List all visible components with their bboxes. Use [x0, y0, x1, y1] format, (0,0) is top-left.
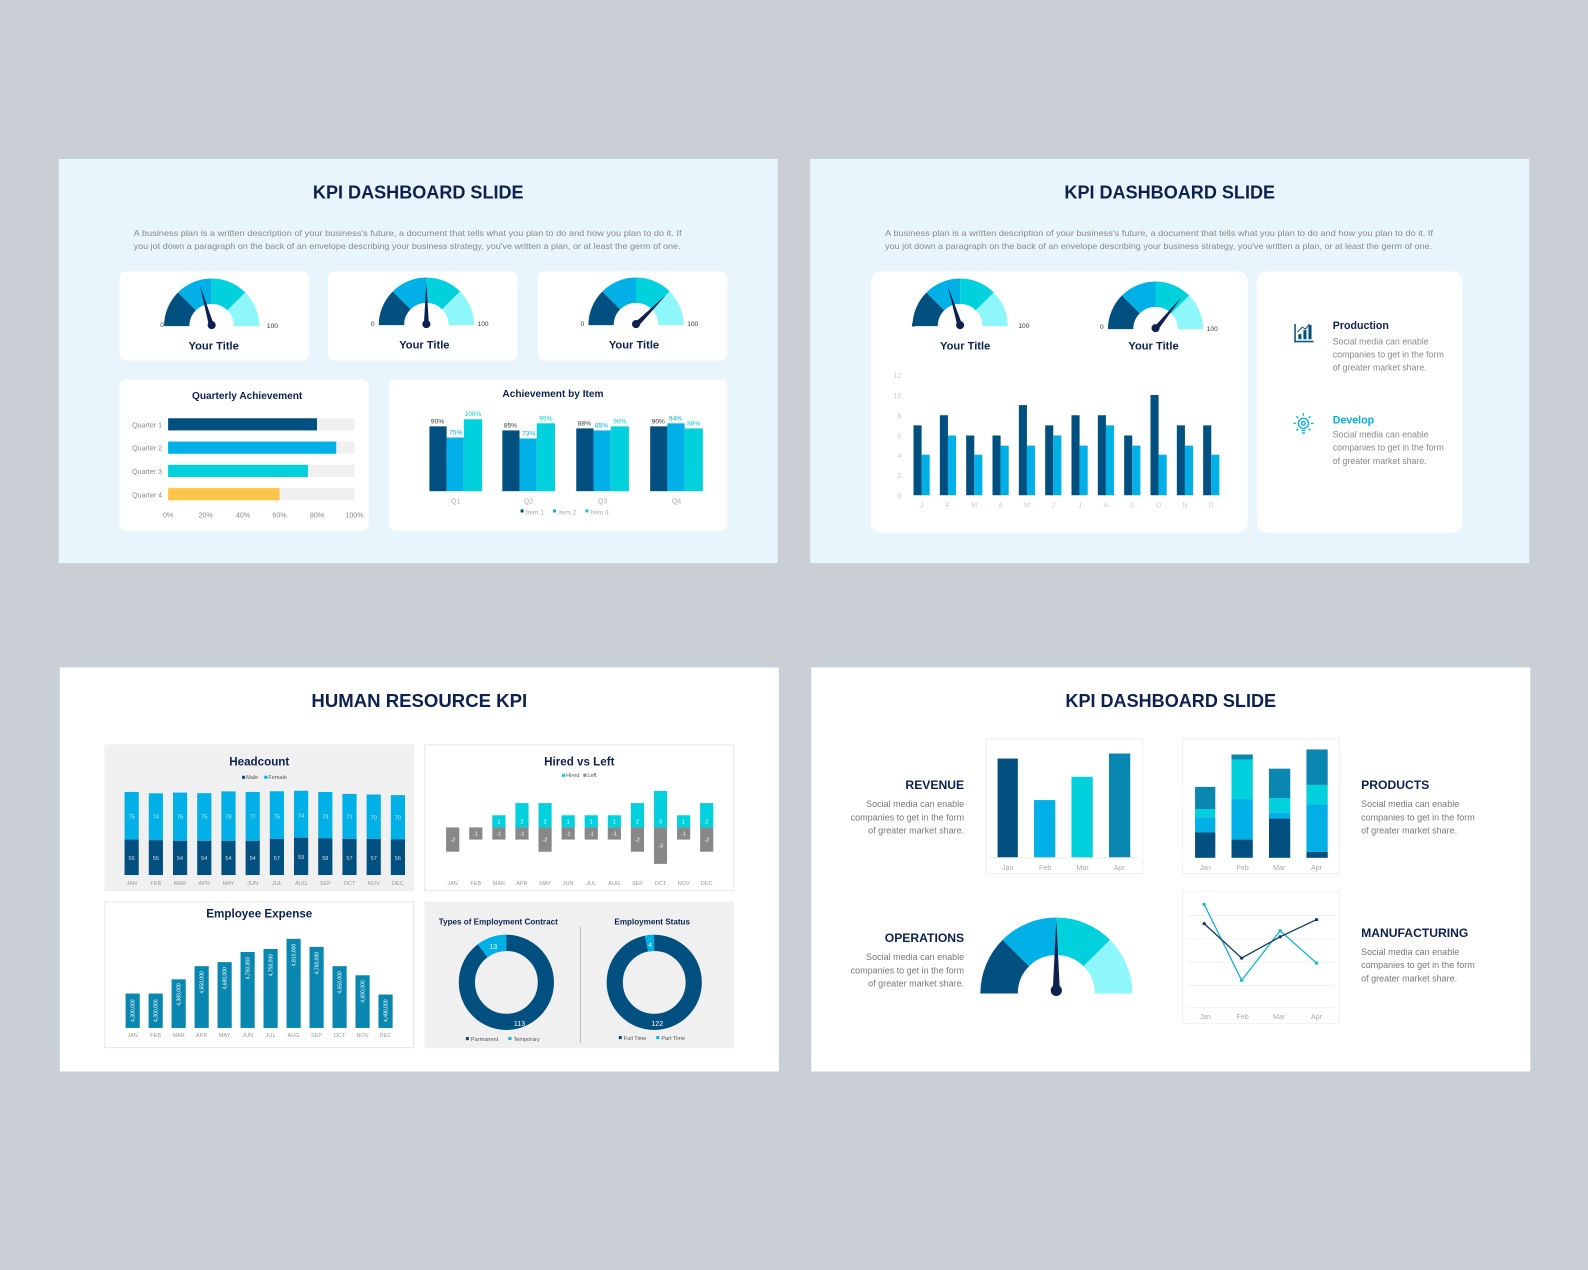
gauge card 1	[120, 271, 309, 361]
monthly bar chart: 6	[897, 433, 901, 441]
gauge card 2: Your Title	[399, 339, 449, 351]
hired vs left chart: AUG	[608, 881, 620, 887]
revenue text: of greater market share.	[868, 826, 964, 836]
achievement by item chart: Item 2	[558, 509, 577, 516]
hired vs left chart: -2	[635, 838, 640, 844]
employee expense chart: 4,650,000	[338, 971, 344, 994]
title: KPI DASHBOARD SLIDE	[1065, 691, 1276, 711]
hired vs left chart: Hired	[566, 773, 579, 779]
employee expense chart: 4,300,000	[154, 999, 160, 1022]
headcount chart: 75	[274, 814, 280, 820]
text: develop: Social media can enable	[1333, 430, 1429, 440]
hired vs left chart: Hired vs Left	[544, 756, 615, 769]
icon: lightbulb	[1293, 413, 1314, 433]
employee expense chart: FEB	[150, 1033, 161, 1039]
hired vs left chart: MAR	[493, 881, 505, 887]
quarterly achievement chart: Quarterly Achievement	[192, 391, 303, 402]
quarterly achievement chart: Quarter 1	[132, 421, 162, 429]
products stacked bar chart: Mar	[1273, 864, 1286, 872]
donut: employment contract	[439, 918, 562, 1043]
text: production: Production	[1333, 320, 1389, 332]
employee expense chart: 4,380,000	[177, 983, 183, 1006]
monthly bar chart: D	[1209, 501, 1214, 509]
text: production: Social media can enable	[1333, 336, 1429, 346]
gauge card 2: 100	[478, 321, 489, 328]
headcount chart: 75	[129, 814, 135, 820]
headcount chart: JUL	[272, 881, 282, 887]
hired vs left chart: -2	[704, 838, 709, 844]
gauge card 3: 0	[580, 321, 584, 328]
hired vs left chart: -1	[589, 832, 594, 838]
headcount chart: 54	[225, 856, 232, 862]
headcount chart: DEC	[392, 881, 404, 887]
manufacturing line chart	[1182, 892, 1339, 1023]
achievement by item chart: 90%	[613, 418, 627, 425]
hired vs left chart: FEB	[470, 881, 481, 887]
gauge 2	[1100, 282, 1218, 352]
achievement by item chart: Q3	[598, 497, 607, 505]
manufacturing line chart: Feb	[1237, 1013, 1249, 1021]
monthly bar chart: M	[971, 501, 977, 509]
slide 3: human resource KPI	[60, 667, 779, 1071]
hired vs left chart: 2	[636, 819, 639, 825]
revenue text	[851, 778, 964, 836]
text: production	[1333, 320, 1444, 373]
headcount chart: 59	[298, 855, 304, 861]
operations text: Social media can enable	[866, 952, 964, 962]
text: develop: Develop	[1333, 414, 1375, 426]
intro paragraph: you jot down a paragraph on the back of an envelope describing your business strategy, you've written a plan, or at least the germ of one.	[885, 241, 1432, 251]
gauge 2: 100	[1207, 326, 1218, 333]
monthly bar chart: 8	[897, 412, 901, 420]
monthly bar chart: O	[1156, 501, 1162, 509]
operations text: companies to get in the form	[851, 965, 964, 975]
revenue text: companies to get in the form	[851, 812, 964, 822]
achievement by item chart: 100%	[465, 411, 482, 418]
intro paragraph	[134, 228, 682, 251]
hired vs left chart: 2	[520, 819, 524, 825]
monthly bar chart: J	[1051, 501, 1055, 509]
employee expense chart: OCT	[334, 1033, 346, 1039]
revenue bar chart: Jan	[1002, 864, 1013, 872]
hired vs left chart: JUN	[563, 881, 574, 887]
headcount chart: 76	[177, 814, 183, 820]
quarterly achievement chart	[120, 380, 369, 531]
headcount chart: NOV	[368, 881, 380, 887]
achievement by item chart: 90%	[652, 418, 665, 425]
products stacked bar chart: Feb	[1237, 864, 1249, 872]
text: production: companies to get in the form	[1333, 350, 1444, 360]
employee expense chart: SEP	[311, 1033, 322, 1039]
gauge card 2: 0	[371, 321, 375, 328]
donut: employment status: Part Time	[661, 1036, 685, 1042]
quarterly achievement chart: 0%	[163, 512, 174, 520]
gauge 2: Your Title	[1128, 340, 1179, 352]
manufacturing text: of greater market share.	[1361, 973, 1457, 983]
gauge 2: 0	[1100, 324, 1104, 331]
revenue text: Social media can enable	[866, 799, 964, 809]
operations text: OPERATIONS	[885, 931, 964, 945]
headcount chart: 74	[153, 814, 159, 820]
revenue bar chart	[986, 739, 1143, 874]
employee expense chart: DEC	[380, 1033, 391, 1039]
hired vs left chart: -3	[658, 844, 663, 850]
donut: employment contract: Types of Employment Contract	[439, 918, 558, 927]
headcount chart: OCT	[344, 881, 356, 887]
title: HUMAN RESOURCE KPI	[311, 691, 527, 711]
monthly bar chart: 4	[897, 452, 901, 460]
hired vs left chart: JAN	[447, 881, 458, 887]
headcount chart: 74	[298, 813, 304, 819]
achievement by item chart: 90%	[431, 418, 444, 425]
monthly bar chart: 2	[897, 472, 901, 480]
quarterly achievement chart: 80%	[310, 512, 325, 520]
achievement by item chart: Achievement by Item	[502, 389, 604, 400]
monthly bar chart: J	[920, 501, 924, 509]
monthly bar chart: 0	[897, 492, 901, 500]
monthly bar chart: J	[1078, 501, 1082, 509]
icon: chart	[1294, 324, 1314, 342]
donut: employment status	[608, 918, 701, 1042]
employee expense chart: 4,750,000	[246, 957, 252, 979]
achievement by item chart: Q4	[672, 497, 681, 505]
employee expense chart: MAY	[219, 1033, 231, 1039]
monthly bar chart: F	[946, 501, 951, 509]
hired vs left chart: NOV	[678, 881, 690, 887]
hired vs left chart: -1	[566, 832, 571, 838]
headcount chart: 57	[346, 856, 353, 862]
employee expense chart: 4,600,000	[361, 980, 367, 1003]
quarterly achievement chart: Quarter 3	[132, 468, 162, 476]
headcount chart: 70	[371, 815, 377, 821]
achievement by item chart	[389, 380, 727, 531]
quarterly achievement chart: 40%	[236, 512, 251, 520]
gauge card 1: 100	[267, 323, 278, 330]
text: develop: companies to get in the form	[1333, 443, 1444, 453]
manufacturing text: companies to get in the form	[1361, 960, 1475, 970]
gauge card 1: 0	[160, 322, 164, 329]
employee expense chart: Employee Expense	[206, 908, 313, 921]
quarterly achievement chart: Quarter 4	[132, 491, 162, 499]
quarterly achievement chart: 20%	[199, 512, 213, 520]
headcount chart: 56	[395, 856, 401, 862]
employee expense chart: AUG	[288, 1033, 300, 1039]
monthly bar chart: M	[1024, 501, 1030, 509]
slide 2: KPI dashboard	[810, 159, 1529, 563]
intro paragraph: A business plan is a written description of your business's future, a document that tells what you plan to do and how you plan to do it. If	[885, 228, 1434, 238]
employee expense chart: 4,300,000	[131, 999, 137, 1022]
headcount chart: SEP	[320, 881, 331, 887]
hired vs left chart: JUL	[586, 881, 596, 887]
donut: employment status: Full Time	[624, 1036, 646, 1042]
hired vs left chart: 2	[544, 819, 547, 825]
hired vs left chart: SEP	[632, 881, 643, 887]
donut: employment status: 4	[649, 943, 653, 949]
headcount chart: 56	[129, 856, 135, 862]
slide 4: KPI dashboard	[811, 667, 1530, 1071]
employee expense chart: JAN	[127, 1033, 138, 1039]
gauge 1: Your Title	[940, 340, 990, 352]
hired vs left chart: APR	[516, 881, 528, 887]
headcount chart: 78	[225, 814, 232, 820]
headcount chart: 54	[177, 856, 183, 862]
products stacked bar chart	[1182, 739, 1339, 874]
headcount chart: APR	[199, 881, 210, 887]
intro paragraph	[885, 228, 1434, 251]
revenue bar chart: Apr	[1114, 864, 1125, 872]
manufacturing text: MANUFACTURING	[1361, 926, 1468, 940]
achievement by item chart: Item 3	[590, 509, 609, 516]
employee expense chart: 4,680,000	[223, 967, 229, 990]
headcount chart: 55	[153, 856, 159, 862]
achievement by item chart: Item 1	[526, 509, 544, 516]
gauge card 1: Your Title	[189, 340, 239, 352]
products stacked bar chart: Jan	[1199, 864, 1211, 872]
employee expense chart	[105, 902, 414, 1048]
monthly bar chart: A	[1104, 501, 1109, 509]
hired vs left chart: 3	[659, 819, 662, 825]
donut: employment contract: 13	[489, 943, 497, 951]
gauge card 3	[538, 271, 727, 361]
headcount chart: 77	[250, 814, 256, 820]
gauge card 2	[328, 271, 518, 361]
headcount chart: MAR	[174, 881, 186, 887]
manufacturing line chart: Jan	[1199, 1013, 1211, 1021]
gauge 1	[912, 279, 1030, 352]
hired vs left chart: -1	[612, 832, 617, 838]
operations text: of greater market share.	[868, 978, 964, 988]
donut: employment contract: Parmanent	[471, 1037, 499, 1043]
quarterly achievement chart: 60%	[272, 512, 287, 520]
employee expense chart: MAR	[172, 1033, 185, 1039]
headcount chart: 57	[371, 856, 377, 862]
achievement by item chart: 94%	[669, 415, 682, 422]
monthly bar chart: S	[1130, 501, 1135, 509]
employee expense chart: 4,760,000	[315, 952, 321, 974]
hired vs left chart: 1	[682, 819, 685, 825]
headcount chart: 54	[201, 856, 207, 862]
panel: production and develop	[1257, 271, 1462, 533]
hired vs left chart: -1	[473, 832, 478, 838]
achievement by item chart: 85%	[595, 422, 608, 429]
donut charts panel	[424, 901, 734, 1048]
hired vs left chart: 1	[567, 819, 570, 825]
headcount chart: 73	[322, 814, 328, 820]
intro paragraph: A business plan is a written description of your business's future, a document that tells what you plan to do and how you plan to do it. If	[134, 228, 682, 238]
employee expense chart: NOV	[357, 1033, 369, 1039]
headcount chart: FEB	[150, 881, 162, 887]
title: KPI DASHBOARD SLIDE	[313, 183, 524, 203]
operations text	[851, 931, 964, 988]
headcount chart: 70	[395, 815, 401, 821]
text: develop: of greater market share.	[1333, 456, 1427, 466]
gauge card 3: Your Title	[609, 339, 659, 351]
headcount chart: 57	[274, 856, 280, 862]
hired vs left chart: -1	[496, 832, 501, 838]
products stacked bar chart: Apr	[1311, 864, 1323, 872]
headcount chart: 54	[250, 856, 256, 862]
employee expense chart: 4,810,000	[292, 944, 298, 966]
donut: employment contract: Temporary	[513, 1037, 540, 1043]
achievement by item chart: 88%	[578, 420, 591, 427]
monthly bar chart: 10	[893, 392, 901, 400]
hired vs left chart: 1	[613, 819, 616, 825]
achievement by item chart: 88%	[687, 420, 700, 427]
products text: Social media can enable	[1361, 799, 1459, 809]
employee expense chart: 4,490,000	[384, 999, 390, 1022]
gauge 1: 0	[912, 322, 916, 329]
gauge 1: 100	[1018, 323, 1030, 330]
panel: gauges and bar chart	[871, 271, 1248, 533]
hired vs left chart: OCT	[655, 881, 667, 887]
text: production: of greater market share.	[1333, 363, 1427, 373]
quarterly achievement chart: 100%	[345, 512, 364, 520]
hired vs left chart: 1	[497, 819, 500, 825]
headcount chart: AUG	[295, 881, 307, 887]
slide 1: KPI dashboard	[59, 159, 778, 563]
donut: employment status: 122	[651, 1020, 663, 1028]
monthly bar chart: A	[998, 501, 1003, 509]
revenue bar chart: Feb	[1039, 864, 1051, 872]
achievement by item chart: 73%	[522, 430, 535, 437]
achievement by item chart: Q2	[524, 497, 533, 505]
hired vs left chart: Left	[587, 773, 597, 779]
hired vs left chart: 1	[590, 819, 593, 825]
donut: employment contract: 113	[514, 1020, 525, 1028]
hired vs left chart: DEC	[701, 881, 713, 887]
text: develop	[1333, 414, 1444, 466]
hired vs left chart: 2	[705, 819, 708, 825]
headcount chart: JAN	[126, 881, 137, 887]
products text: companies to get in the form	[1361, 812, 1475, 822]
hired vs left chart: -1	[681, 832, 686, 838]
hired vs left chart: -2	[450, 838, 455, 844]
headcount chart: Headcount	[229, 756, 289, 769]
donut: employment status: Employment Status	[614, 918, 690, 927]
monthly bar chart: 12	[893, 372, 901, 380]
achievement by item chart: 85%	[504, 422, 517, 429]
revenue text: REVENUE	[905, 778, 964, 792]
achievement by item chart: 95%	[539, 415, 553, 422]
manufacturing line chart: Apr	[1311, 1013, 1323, 1021]
title: KPI DASHBOARD SLIDE	[1064, 183, 1275, 203]
products text	[1361, 778, 1475, 836]
employee expense chart: 4,750,000	[269, 954, 275, 976]
operations gauge	[980, 918, 1132, 996]
hired vs left chart	[425, 745, 734, 891]
achievement by item chart: Q1	[451, 497, 461, 505]
headcount chart: Female	[268, 775, 287, 781]
headcount chart: JUN	[247, 881, 258, 887]
headcount chart: 58	[322, 856, 328, 862]
quarterly achievement chart: Quarter 2	[132, 445, 162, 453]
intro paragraph: you jot down a paragraph on the back of an envelope describing your business strategy, you've written a plan, or at least the germ of one.	[134, 241, 681, 251]
manufacturing line chart: Mar	[1273, 1013, 1286, 1021]
revenue bar chart: Mar	[1077, 864, 1089, 872]
gauge card 3: 100	[687, 321, 699, 328]
hired vs left chart: -2	[543, 838, 548, 844]
monthly bar chart: N	[1182, 501, 1187, 509]
hired vs left chart: -1	[519, 832, 524, 838]
employee expense chart: JUN	[242, 1033, 253, 1039]
employee expense chart: APR	[196, 1033, 207, 1039]
products text: of greater market share.	[1361, 826, 1457, 836]
headcount chart: Male	[246, 775, 258, 781]
achievement by item chart: 75%	[449, 429, 462, 436]
hired vs left chart: MAY	[539, 881, 551, 887]
monthly bar chart	[893, 372, 1219, 509]
products text: PRODUCTS	[1361, 778, 1429, 792]
manufacturing text: Social media can enable	[1361, 947, 1459, 957]
manufacturing text	[1361, 926, 1475, 983]
headcount chart: 75	[201, 814, 207, 820]
headcount chart: 71	[346, 814, 353, 820]
employee expense chart: JUL	[266, 1033, 276, 1039]
headcount chart: MAY	[223, 881, 235, 887]
employee expense chart: 4,650,000	[200, 971, 206, 994]
headcount chart	[104, 744, 414, 891]
